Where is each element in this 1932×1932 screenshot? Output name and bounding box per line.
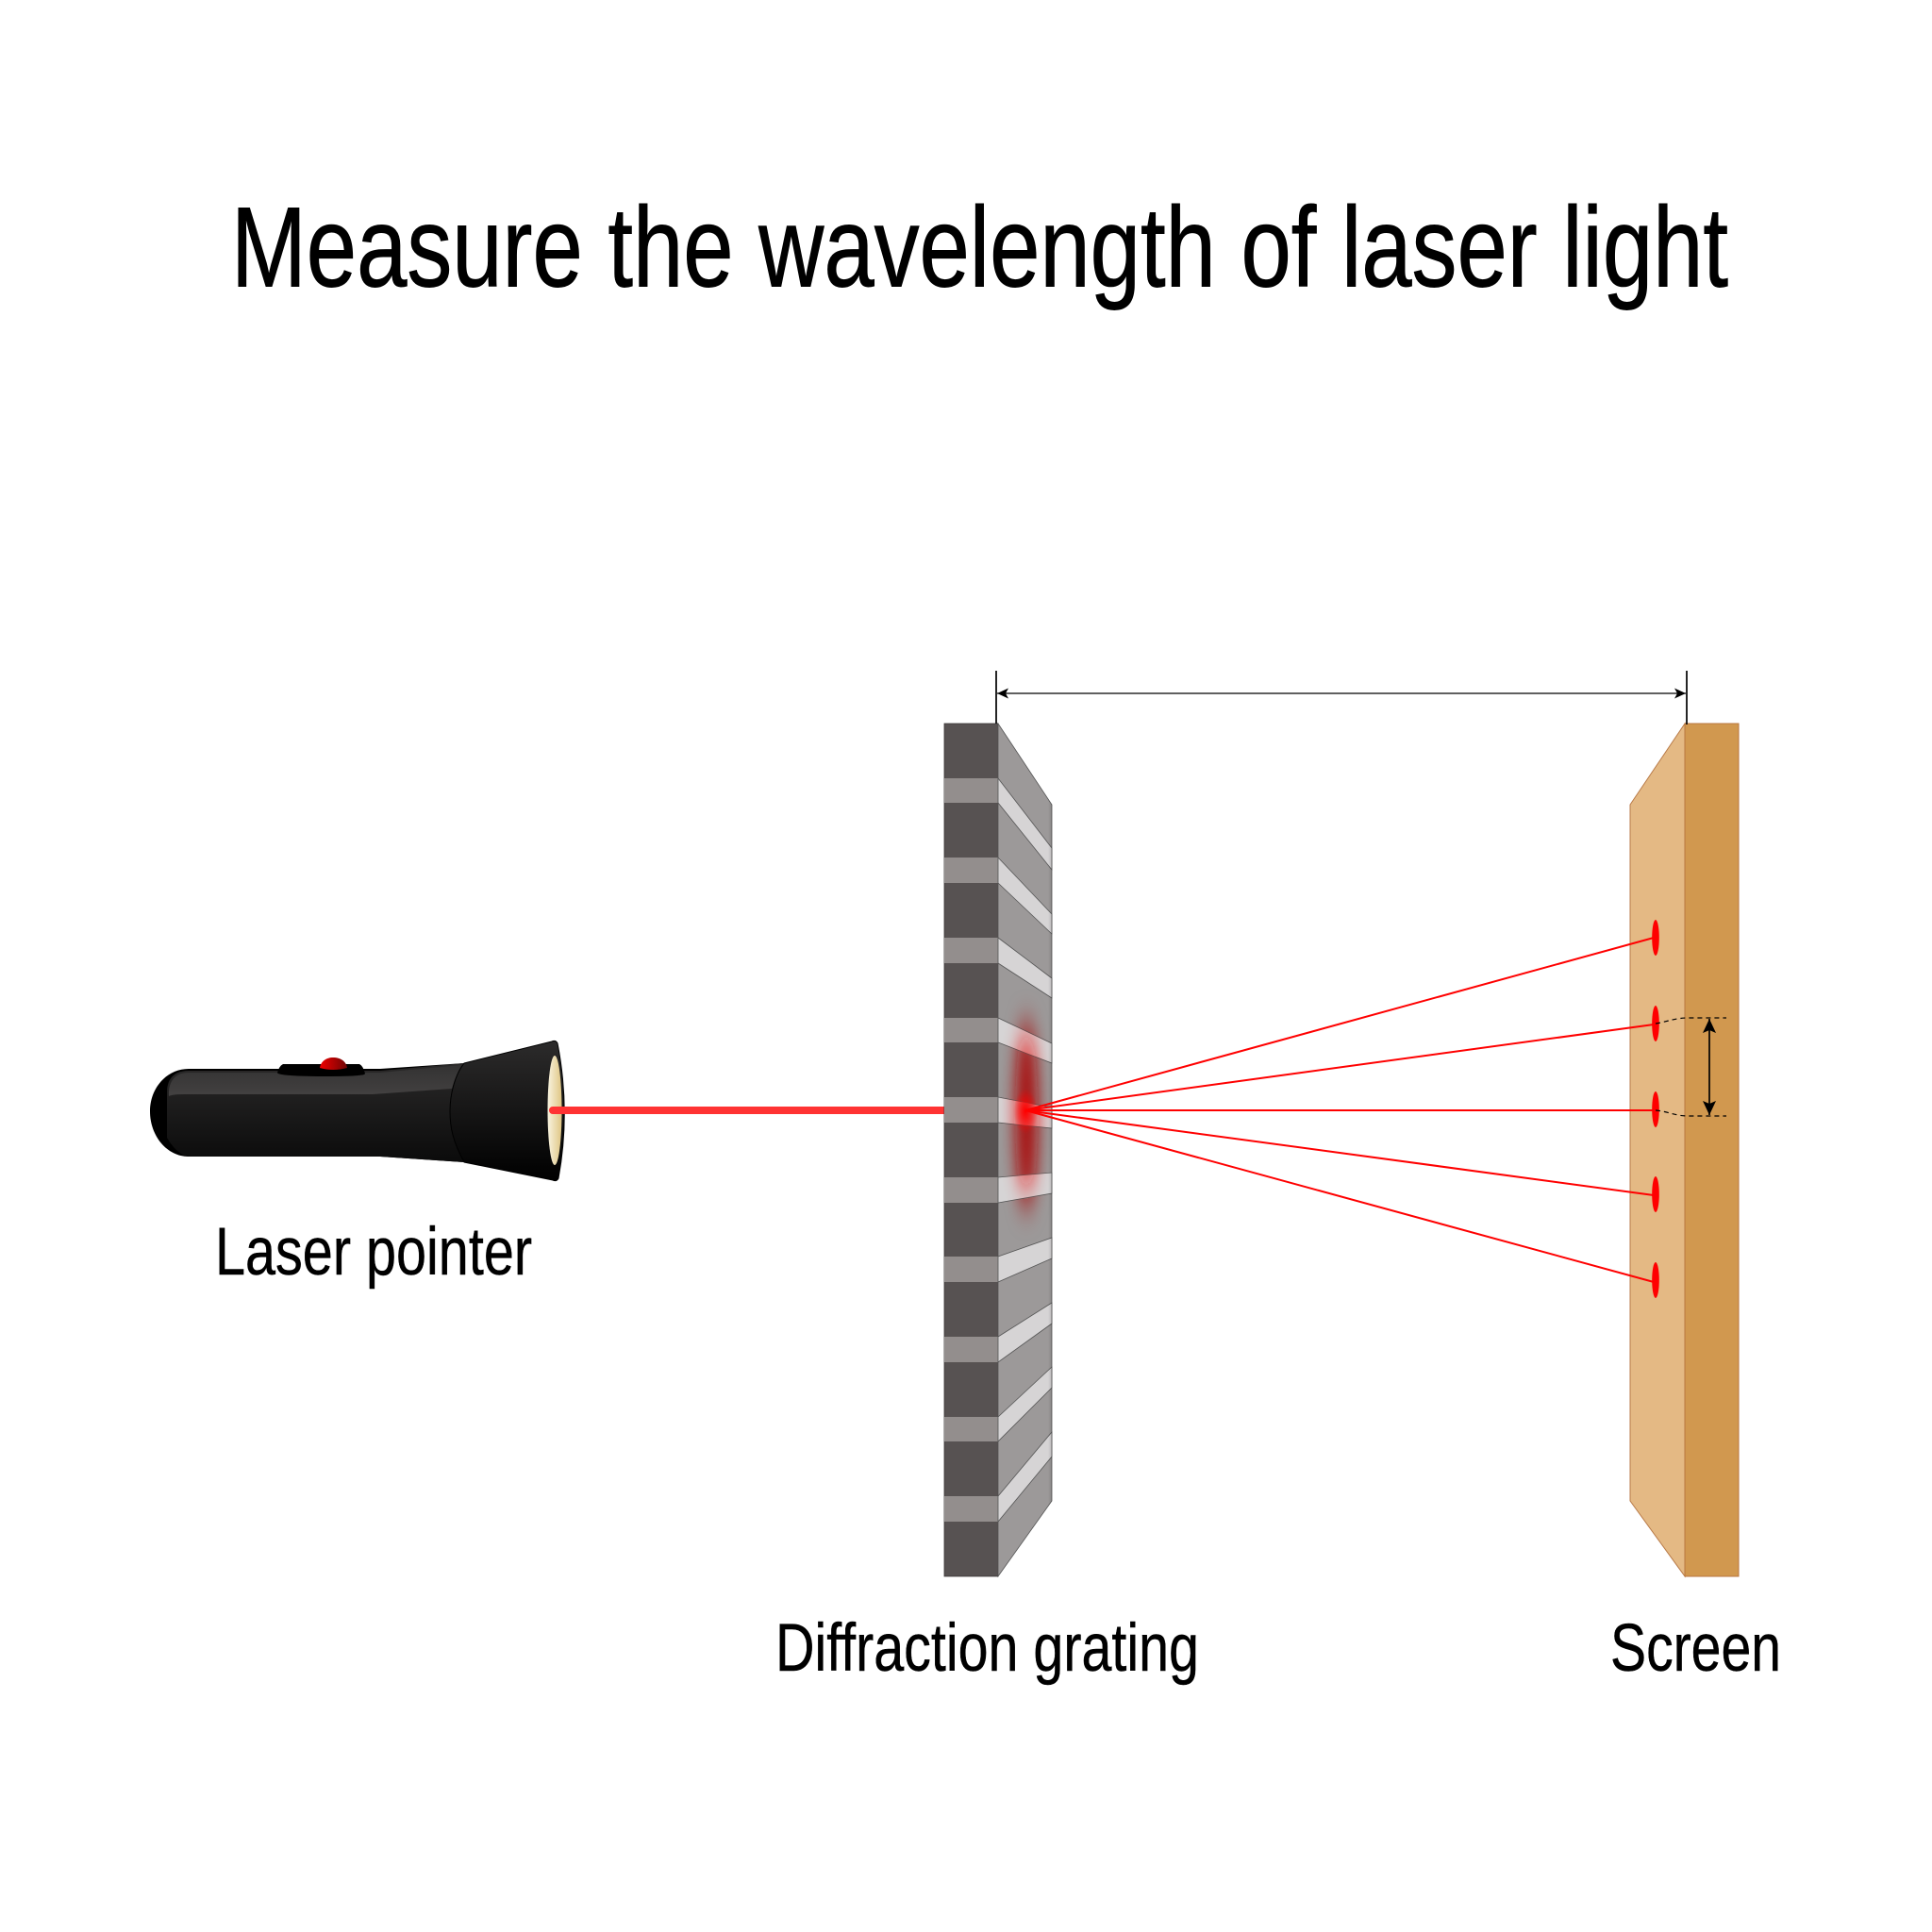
grating dark glow bbox=[1015, 1021, 1038, 1209]
screen side face bbox=[1630, 724, 1685, 1576]
grating glow on slits bbox=[1014, 1031, 1039, 1191]
grating side slits bbox=[998, 778, 1052, 1522]
label: screen: Screen bbox=[1610, 1611, 1781, 1686]
left tick bbox=[995, 671, 997, 724]
grating side face bbox=[998, 724, 1052, 1576]
laser beam bbox=[553, 1107, 944, 1114]
grating front slits bbox=[944, 778, 998, 1522]
icon: laser pointer bbox=[150, 1041, 564, 1181]
laser body highlight bbox=[169, 1065, 461, 1096]
grating glow core bbox=[1013, 1089, 1038, 1134]
laser button base bbox=[277, 1064, 365, 1076]
distance measure bbox=[996, 671, 1687, 724]
panel: screen bbox=[1630, 724, 1739, 1576]
dashed guide lower bbox=[1656, 1110, 1726, 1116]
dashed guide upper bbox=[1656, 1018, 1726, 1024]
diffracted red rays bbox=[1025, 938, 1654, 1282]
laser lens bbox=[547, 1056, 562, 1165]
screen front face bbox=[1685, 724, 1739, 1576]
grating front face bbox=[944, 724, 998, 1576]
laser head bbox=[450, 1041, 564, 1181]
panel: diffraction grating bbox=[944, 724, 1052, 1576]
distance arrow bbox=[997, 692, 1686, 694]
right tick bbox=[1686, 671, 1688, 724]
red dots on screen bbox=[1652, 920, 1659, 1298]
label: diffraction grating: Diffraction grating bbox=[775, 1611, 1199, 1686]
laser button bbox=[320, 1058, 347, 1070]
grating right edge bbox=[1048, 799, 1052, 1506]
spacing arrow bbox=[1708, 1019, 1710, 1115]
laser body barrel bbox=[167, 1063, 464, 1162]
laser body silhouette bbox=[150, 1041, 564, 1181]
label: laser pointer: Laser pointer bbox=[215, 1215, 532, 1290]
spot spacing measure bbox=[1656, 1018, 1726, 1116]
